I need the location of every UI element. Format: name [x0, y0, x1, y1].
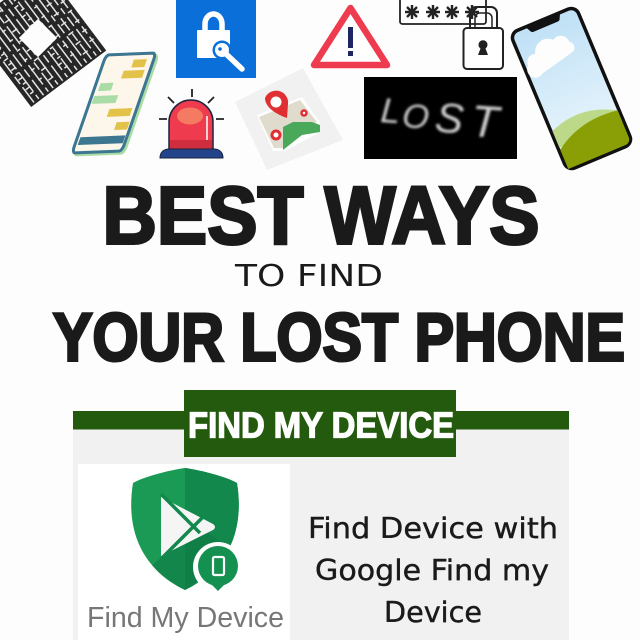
- heading band: FIND MY DEVICE: [188, 404, 454, 446]
- image: LOST on black: T: [469, 95, 504, 148]
- panel: find my device: [73, 390, 569, 640]
- icon: shield: [131, 468, 243, 592]
- description text: Find Device with: [308, 512, 558, 545]
- app logo card: [78, 464, 290, 640]
- image: LOST on black: [364, 77, 517, 159]
- icon: password field and padlock: [400, 0, 503, 69]
- icon: map with pins: [235, 68, 343, 170]
- description text: Google Find my: [315, 554, 549, 587]
- heading band: [73, 390, 569, 457]
- subtitle: to find: TO FIND: [234, 259, 383, 294]
- description text: [308, 512, 558, 629]
- app name: Find My Device: [87, 602, 284, 634]
- icon: blue padlock and key: [176, 0, 256, 78]
- image: LOST on black: O: [400, 96, 431, 138]
- description text: Device: [384, 596, 482, 629]
- icon: warning triangle: [314, 8, 387, 65]
- icon: maze: [0, 0, 106, 107]
- icon: chat phone: [72, 53, 158, 155]
- image: LOST on black: L: [379, 91, 402, 131]
- image: LOST on black: S: [433, 93, 466, 143]
- title: best ways: BEST WAYS: [102, 170, 540, 262]
- icon: red siren: [159, 89, 224, 158]
- icon: smartphone with landscape: [510, 6, 633, 171]
